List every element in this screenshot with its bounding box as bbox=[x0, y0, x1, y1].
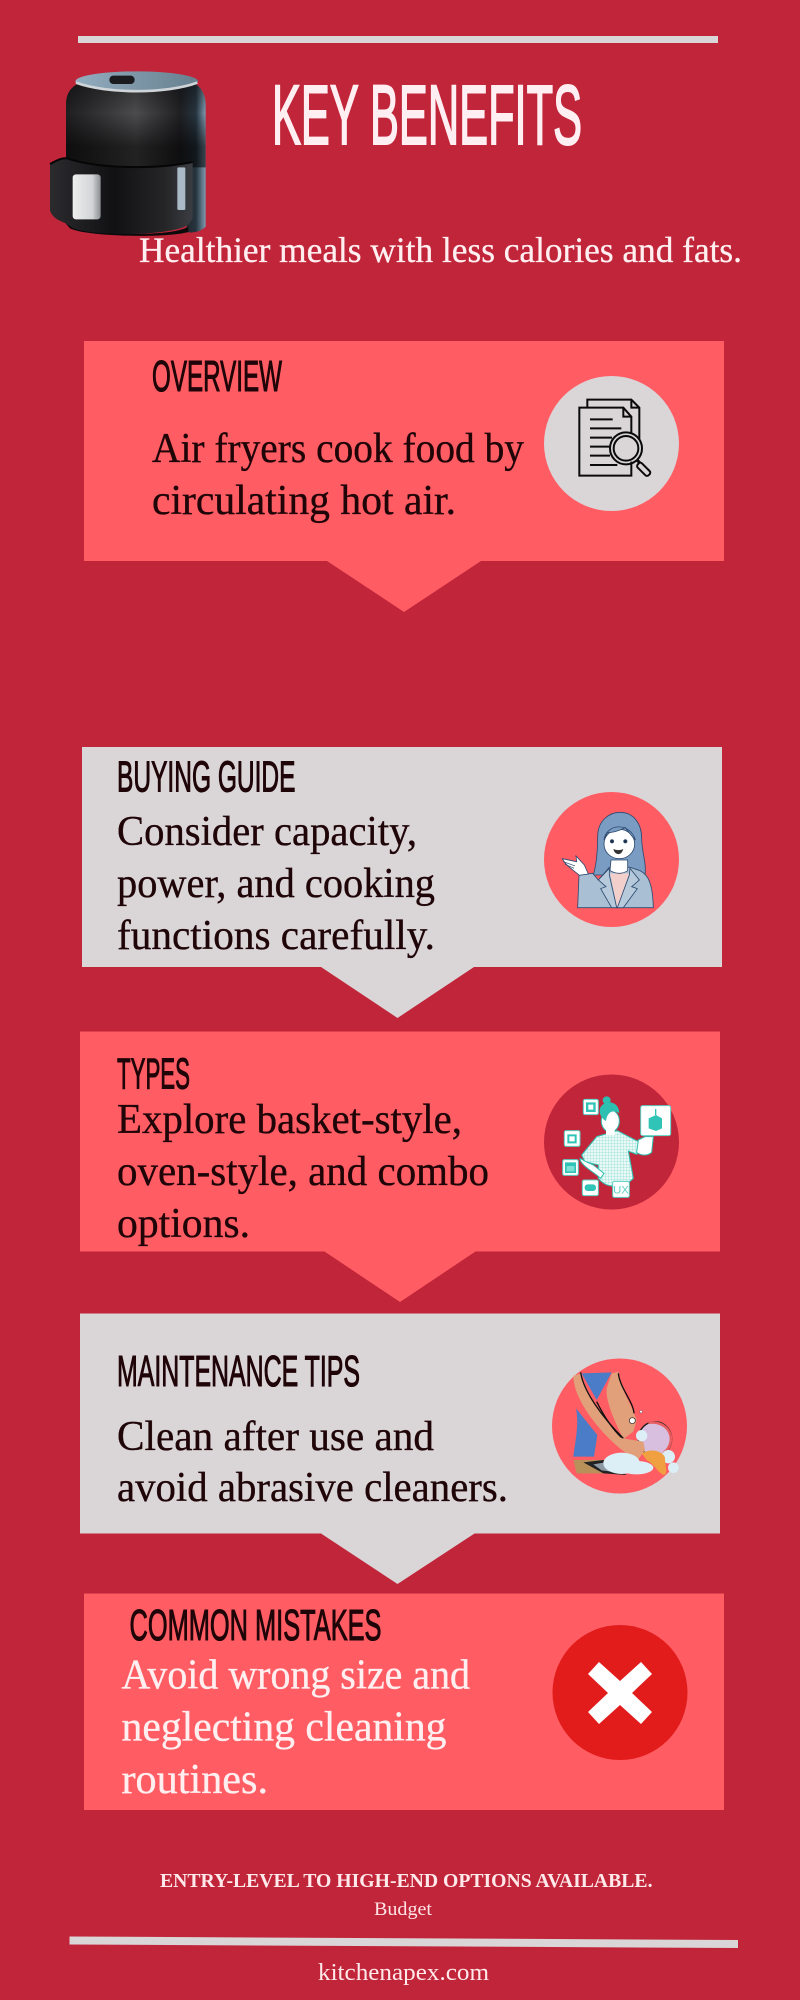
text: types body: oven-style, and combo bbox=[117, 1149, 489, 1195]
icon: document with magnifier bbox=[544, 376, 679, 511]
footer text: budget note: ENTRY-LEVEL TO HIGH-END OPTIONS AVAILABLE. bbox=[160, 1870, 652, 1892]
heading: common mistakes: COMMON MISTAKES bbox=[130, 1601, 382, 1650]
text: overview body: Air fryers cook food by bbox=[152, 426, 524, 472]
text: buying guide body: Consider capacity, bbox=[117, 809, 417, 855]
label: UX card text: UX bbox=[613, 1185, 629, 1197]
bottom divider bar bbox=[70, 1936, 738, 1948]
text: maintenance body bbox=[117, 1414, 508, 1511]
panel: buying guide bbox=[82, 747, 722, 1018]
footer text: budget: Budget bbox=[374, 1899, 433, 1920]
heading: buying guide: BUYING GUIDE bbox=[117, 752, 296, 802]
text: buying guide body: functions carefully. bbox=[117, 913, 435, 959]
text: types body: options. bbox=[117, 1201, 250, 1247]
panel: common mistakes bbox=[84, 1594, 724, 1810]
icon: woman presenting bbox=[544, 792, 679, 927]
heading: overview: OVERVIEW bbox=[152, 352, 282, 401]
text: maintenance body: Clean after use and bbox=[117, 1414, 434, 1460]
text: common mistakes body bbox=[122, 1652, 470, 1803]
heading: types: TYPES bbox=[117, 1050, 190, 1098]
text: overview body bbox=[152, 426, 524, 524]
panel: overview bbox=[84, 341, 724, 612]
footer text: website: kitchenapex.com bbox=[318, 1960, 489, 1986]
text: maintenance body: avoid abrasive cleaners. bbox=[117, 1465, 508, 1511]
icon: air fryer bbox=[50, 71, 206, 236]
panel: types bbox=[80, 1032, 720, 1302]
text: overview body: circulating hot air. bbox=[152, 478, 456, 524]
heading: maintenance tips: MAINTENANCE TIPS bbox=[117, 1347, 360, 1396]
text: buying guide body: power, and cooking bbox=[117, 861, 435, 907]
icon: washing dishes bbox=[552, 1358, 687, 1494]
text: types body: Explore basket-style, bbox=[117, 1097, 462, 1143]
text: common mistakes body: routines. bbox=[122, 1757, 268, 1803]
text: buying guide body bbox=[117, 809, 435, 959]
text: common mistakes body: neglecting cleaning bbox=[122, 1704, 446, 1750]
subtitle: Healthier meals with less calories and fats. bbox=[139, 230, 742, 270]
panel: maintenance tips bbox=[80, 1314, 720, 1584]
top divider bar bbox=[78, 36, 718, 43]
icon: red cross bbox=[552, 1625, 688, 1760]
icon: person with app cards bbox=[544, 1074, 679, 1210]
text: types body bbox=[117, 1097, 489, 1247]
text: common mistakes body: Avoid wrong size and bbox=[122, 1652, 470, 1698]
